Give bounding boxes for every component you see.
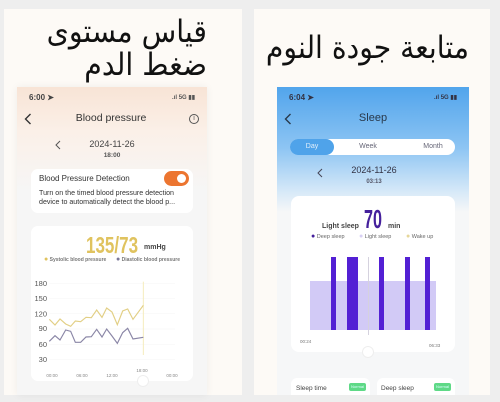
card title: Blood Pressure Detection bbox=[39, 174, 130, 183]
blood pressure line chart: 60 bbox=[39, 340, 47, 349]
reading: 135/73 bbox=[86, 232, 138, 258]
detection card bbox=[31, 169, 193, 213]
sleep chart card bbox=[291, 196, 455, 352]
screen title: Sleep bbox=[359, 112, 387, 124]
tabs bbox=[290, 139, 455, 155]
cursor line bbox=[368, 257, 369, 335]
panel: sleep bbox=[254, 9, 490, 395]
home indicator bbox=[137, 375, 149, 387]
date selector: 2024-11-26 bbox=[351, 165, 397, 175]
blood pressure line chart: 150 bbox=[34, 294, 47, 303]
status badge bbox=[349, 383, 366, 391]
date selector bbox=[55, 139, 135, 159]
heading: Light sleep bbox=[322, 223, 359, 230]
week tab: Week bbox=[359, 143, 377, 150]
date selector: 2024-11-26 bbox=[89, 139, 135, 149]
blood pressure line chart: 120 bbox=[34, 310, 47, 318]
heading: blood pressure measurement: قياس مستوى bbox=[47, 14, 207, 50]
sleep time card bbox=[291, 378, 370, 395]
legend: ● Diastolic blood pressure bbox=[116, 256, 180, 263]
status badge: Normal bbox=[436, 384, 449, 389]
blood pressure line chart: 00:00 bbox=[46, 373, 58, 378]
status bar: .ıl 5G ▮▮ bbox=[172, 95, 195, 101]
info icon: i bbox=[193, 115, 195, 122]
month tab: Month bbox=[423, 143, 443, 150]
legend bbox=[311, 233, 434, 240]
unit: mmHg bbox=[144, 244, 166, 251]
blood pressure line chart: 00:00 bbox=[166, 373, 178, 378]
start time: 00:24 bbox=[300, 339, 311, 344]
card description: device to automatically detect the blood p... bbox=[39, 198, 175, 206]
blood pressure line chart: 12:00 bbox=[106, 373, 118, 378]
previous date arrow bbox=[317, 168, 322, 178]
back arrow bbox=[284, 114, 291, 124]
label: Sleep time bbox=[296, 385, 327, 392]
light sleep block bbox=[310, 281, 436, 330]
legend: ● Wake up bbox=[406, 233, 433, 240]
status bar: 6:04 ➤ bbox=[289, 93, 314, 102]
date selector: 18:00 bbox=[104, 152, 120, 159]
date selector bbox=[317, 165, 397, 185]
status badge bbox=[434, 383, 451, 391]
toggle switch bbox=[164, 171, 189, 186]
phone screen: sleep bbox=[277, 87, 469, 395]
info icon bbox=[189, 114, 199, 124]
value: 70 bbox=[364, 204, 382, 234]
blood pressure line chart: 90 bbox=[39, 324, 47, 333]
phone screen: blood pressure bbox=[17, 87, 207, 395]
legend bbox=[44, 256, 180, 263]
previous date arrow bbox=[55, 140, 60, 150]
home indicator bbox=[362, 346, 374, 358]
card description: Turn on the timed blood pressure detection bbox=[39, 189, 174, 197]
blood pressure line chart: 06:00 bbox=[76, 373, 88, 378]
card description bbox=[39, 189, 175, 206]
legend: ● Deep sleep bbox=[311, 233, 345, 240]
legend: ● Light sleep bbox=[359, 233, 391, 240]
screen title: Blood pressure bbox=[76, 112, 146, 124]
label: Deep sleep bbox=[381, 385, 414, 392]
active tab: Day bbox=[306, 143, 318, 150]
heading: sleep quality tracking: متابعة جودة النوم bbox=[266, 30, 469, 66]
blood pressure line chart: 18:00 bbox=[136, 368, 148, 373]
back arrow bbox=[24, 114, 31, 124]
end time: 06:33 bbox=[429, 343, 440, 348]
date selector: 03:13 bbox=[366, 179, 382, 185]
blood pressure line chart: 180 bbox=[34, 279, 47, 288]
deep sleep card bbox=[377, 378, 455, 395]
status badge: Normal bbox=[351, 384, 364, 389]
chart card bbox=[31, 226, 193, 381]
status bar bbox=[289, 93, 457, 102]
deep sleep bars bbox=[331, 257, 336, 330]
bar chart bbox=[310, 257, 436, 335]
active tab bbox=[290, 139, 334, 155]
status bar: .ıl 5G ▮▮ bbox=[434, 95, 457, 101]
status bar bbox=[29, 93, 195, 102]
unit: min bbox=[388, 223, 400, 230]
status bar: 6:00 ➤ bbox=[29, 93, 54, 102]
panel: blood pressure bbox=[4, 9, 242, 395]
heading: blood pressure measurement bbox=[47, 14, 207, 83]
legend: ● Systolic blood pressure bbox=[44, 256, 106, 263]
blood pressure line chart: 30 bbox=[39, 355, 47, 364]
heading: blood pressure measurement: ضغط الدم bbox=[84, 47, 207, 83]
